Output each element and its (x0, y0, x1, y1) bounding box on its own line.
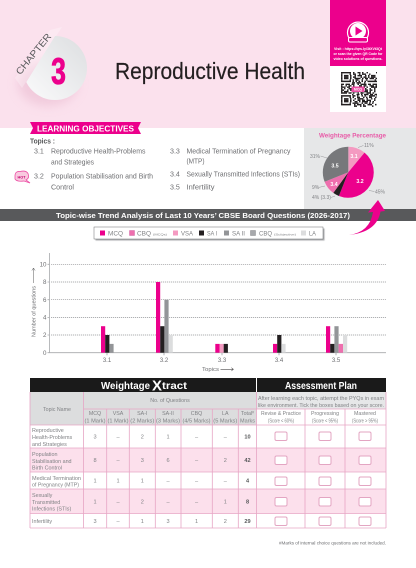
column headers: CBQ (191, 411, 202, 417)
row: infertility: 2 (224, 519, 227, 525)
row: population stabilisation: 2 (224, 458, 227, 464)
checkboxes (275, 432, 371, 526)
row: population stabilisation: – (195, 458, 199, 464)
row: reproductive health: – (195, 434, 199, 440)
row: medical termination (32, 476, 250, 488)
row: infertility: 3 (166, 519, 170, 525)
weightage xtract header: X (152, 378, 162, 394)
legend MCQ (100, 230, 123, 237)
column headers: SA-II (162, 411, 174, 417)
pie outer labels: 9% (312, 185, 320, 191)
legend MCQ: MCQ (108, 231, 123, 237)
row: sexually transmitted infections: 1 (224, 500, 227, 506)
trend analysis band: Topic-wise Trend Analysis of Last 10 Years’ CBSE Board Questions (2026-2017) (56, 211, 351, 220)
row: reproductive health (32, 428, 251, 448)
row: sexually transmitted infections: Transmitted (32, 500, 60, 506)
QR instructions (334, 47, 383, 61)
x axis labels (103, 358, 341, 364)
QR instructions: or scan the given QR Code for (334, 52, 383, 56)
row: population stabilisation: Population (32, 452, 57, 458)
row: medical termination: – (195, 478, 199, 484)
legend CBQ subjective: (Subjective) (274, 232, 296, 236)
assessment columns: (Score > 95%) (352, 418, 378, 424)
learning objectives banner: LEARNING OBJECTIVES (37, 123, 134, 133)
row: population stabilisation: 6 (166, 458, 170, 464)
row: reproductive health: 2 (141, 434, 144, 440)
row: medical termination: 1 (93, 478, 97, 484)
topic 3.1: Reproductive Health-Problems (51, 148, 146, 156)
title: Reproductive Health (115, 58, 305, 84)
row: infertility: 3 (93, 519, 97, 525)
weightage panel background (304, 128, 416, 209)
row: reproductive health: 3 (93, 434, 97, 440)
y axis ticks: 6 (43, 297, 47, 304)
x axis labels: 3.2 (160, 358, 169, 364)
pie outer labels: 45% (375, 190, 386, 196)
column headers: # (252, 410, 254, 414)
bars 3.5 (326, 326, 347, 353)
legend SA I (199, 230, 217, 237)
x axis labels: 3.1 (103, 358, 112, 364)
topic 3.2: Control (51, 184, 74, 192)
column headers: (1 Mark) (108, 418, 129, 424)
legend VSA: VSA (181, 231, 193, 237)
pie inner labels: 3.1 (350, 154, 358, 160)
footnote: #Marks of internal choice questions are not included. (279, 540, 386, 546)
row: population stabilisation (32, 452, 251, 472)
legend CBQ subjective: CBQ (259, 231, 272, 237)
weightage xtract header (30, 378, 256, 394)
pie outer labels: 11% (364, 143, 374, 149)
bar chart (32, 253, 386, 373)
column headers: (2 Marks) (130, 418, 155, 424)
x axis title: Topics (202, 367, 219, 373)
QR instructions: Visit : https://qrs.ly/3tXVt3Qt (334, 47, 383, 51)
row: medical termination: – (224, 478, 228, 484)
row: sexually transmitted infections: Infections (STIs) (32, 506, 71, 512)
y axis ticks (40, 262, 47, 357)
row: medical termination: of Pregnancy (MTP) (32, 482, 79, 488)
row: sexually transmitted infections: 1 (93, 500, 97, 506)
row: population stabilisation: Stabilisation and (32, 459, 72, 465)
topic 3.3: 3.3 (170, 148, 180, 156)
row: sexually transmitted infections: Sexually (32, 493, 53, 499)
row: population stabilisation: 42 (244, 458, 251, 464)
legend VSA (173, 230, 193, 237)
bars 3.4 (273, 335, 286, 353)
row: medical termination: 1 (141, 478, 144, 484)
assessment columns: (Score < 60%) (268, 418, 294, 424)
legend LA (301, 230, 316, 237)
icon: HOT bubble (15, 171, 30, 183)
topic 3.5: 3.5 (170, 184, 180, 192)
assessment instructions (258, 396, 385, 409)
x axis labels: 3.3 (218, 358, 227, 364)
assessment columns: Revise & Practice (261, 411, 301, 417)
row: reproductive health: and Strategies (32, 442, 67, 448)
column headers: (4/5 Marks) (182, 418, 211, 424)
row: medical termination: – (166, 478, 170, 484)
topic 3.1 (34, 148, 146, 167)
arrow (349, 200, 385, 235)
topic 3.3: (MTP) (186, 158, 204, 166)
icon: HOT bubble: HOT (17, 175, 26, 179)
chapter badge (14, 27, 87, 106)
y axis ticks: 2 (43, 332, 47, 339)
column headers: SA-I (137, 411, 147, 417)
row: population stabilisation: 8 (93, 458, 97, 464)
row: infertility: 1 (141, 519, 144, 525)
QR instructions: video solutions of questions. (334, 57, 383, 61)
row: infertility (32, 519, 251, 525)
assessment columns: (Score < 95%) (312, 418, 338, 424)
topics list (30, 136, 300, 192)
legend SA I: SA I (207, 231, 217, 237)
pie outer labels: 4% (3.3) (312, 195, 331, 201)
pie inner labels (330, 154, 364, 188)
legend CBQ MCQs (130, 230, 167, 237)
weightage table (30, 378, 386, 528)
row: medical termination: 4 (246, 478, 250, 484)
row: sexually transmitted infections: – (195, 500, 199, 506)
column headers (43, 398, 255, 424)
row: reproductive health: 1 (166, 434, 170, 440)
icon: video play (348, 22, 368, 42)
row: population stabilisation: – (116, 458, 120, 464)
weightage pie chart (310, 132, 386, 201)
y axis ticks: 4 (43, 315, 47, 322)
column headers: Total (241, 411, 252, 417)
topics heading: Topics : (30, 136, 55, 146)
chapter number: 3 (51, 51, 66, 92)
row: reproductive health: – (224, 434, 228, 440)
x axis labels: 3.4 (275, 358, 284, 364)
topic 3.4: 3.4 (170, 170, 180, 178)
y axis ticks: 8 (43, 279, 47, 286)
bars 3.1 (101, 326, 114, 353)
row: sexually transmitted infections: 8 (246, 500, 249, 506)
x axis title (202, 367, 234, 373)
topic 3.1: 3.1 (34, 148, 44, 156)
row: sexually transmitted infections: – (166, 500, 170, 506)
chapter label: CHAPTER (14, 31, 54, 77)
row: infertility: 1 (195, 519, 198, 525)
pie inner labels: 3.5 (331, 164, 339, 170)
row: reproductive health: 10 (244, 434, 251, 440)
pie inner labels: 3.4 (330, 182, 338, 188)
row: medical termination: Medical Termination (32, 476, 81, 482)
topic 3.2 (34, 172, 153, 192)
row: population stabilisation: 3 (141, 458, 144, 464)
legend CBQ MCQs: (MCQs) (153, 232, 167, 236)
pie inner labels: 3.2 (356, 179, 364, 185)
column headers: VSA (113, 411, 124, 417)
row: sexually transmitted infections: 2 (141, 500, 144, 506)
legend SA II (224, 230, 245, 237)
topic 3.2: Population Stabilisation and Birth (51, 172, 153, 180)
topic 3.5 (170, 184, 215, 192)
QR panel (330, 0, 386, 112)
assessment plan header: Assessment Plan (285, 380, 357, 392)
row backgrounds (30, 392, 386, 514)
x axis labels: 3.5 (332, 358, 341, 364)
row: infertility: – (116, 519, 120, 525)
table grid (30, 392, 386, 528)
topic 3.5: Infertility (186, 184, 215, 192)
bars 3.3 (215, 344, 228, 353)
row: sexually transmitted infections (32, 493, 249, 512)
column headers: Topic Name (43, 407, 71, 413)
pie slices (323, 147, 374, 198)
topic 3.2: 3.2 (34, 172, 44, 180)
pie outer labels (310, 143, 386, 201)
assessment columns: Mastered (354, 411, 376, 417)
assessment plan header (257, 378, 386, 392)
column headers: Marks (240, 418, 255, 424)
column headers: (1 Mark) (84, 418, 106, 424)
y axis ticks: 10 (40, 262, 47, 268)
column headers: No. of Questions (150, 398, 190, 404)
row: infertility: 29 (244, 519, 251, 525)
weightage xtract header: Weightage (101, 380, 150, 392)
row: population stabilisation: Birth Control (32, 466, 62, 472)
header background (0, 0, 416, 128)
topic 3.4: Sexually Transmitted Infections (STIs) (186, 170, 300, 178)
column headers: (3 Marks) (156, 418, 180, 424)
column headers: (5 Marks) (213, 418, 238, 424)
assessment columns: Progressing (311, 411, 339, 417)
row: reproductive health: – (116, 434, 120, 440)
column headers: MCQ (89, 411, 101, 417)
legend CBQ MCQs: CBQ (137, 231, 151, 237)
row: infertility: Infertility (32, 519, 52, 525)
legend (94, 227, 324, 240)
y axis title: Number of questions (32, 286, 38, 337)
bars 3.2 (156, 282, 173, 353)
legend SA II: SA II (232, 231, 245, 237)
assessment columns (261, 411, 378, 424)
weightage xtract header: tract (162, 380, 188, 392)
row: sexually transmitted infections: – (116, 500, 120, 506)
column headers: LA (222, 411, 229, 417)
topic 3.3 (170, 148, 291, 166)
topic 3.3: Medical Termination of Pregnancy (186, 148, 291, 156)
legend LA: LA (309, 231, 316, 237)
assessment instructions: like environment. Tick the boxes based on your score. (258, 403, 384, 409)
assessment instructions: After learning each topic, attempt the PYQs in exam (258, 396, 385, 402)
trend analysis band (0, 209, 416, 221)
QR badge: MCQ (354, 88, 362, 92)
legend CBQ subjective (250, 230, 296, 237)
y axis ticks: 0 (43, 350, 47, 357)
topic 3.1: and Strategies (51, 159, 94, 167)
pie outer labels: 31% (310, 154, 321, 160)
row: medical termination: 1 (116, 478, 120, 484)
row: reproductive health: Reproductive (32, 428, 64, 434)
row: reproductive health: Health-Problems (32, 435, 72, 441)
pie title: Weightage Percentage (319, 132, 386, 140)
QR code (341, 73, 377, 106)
